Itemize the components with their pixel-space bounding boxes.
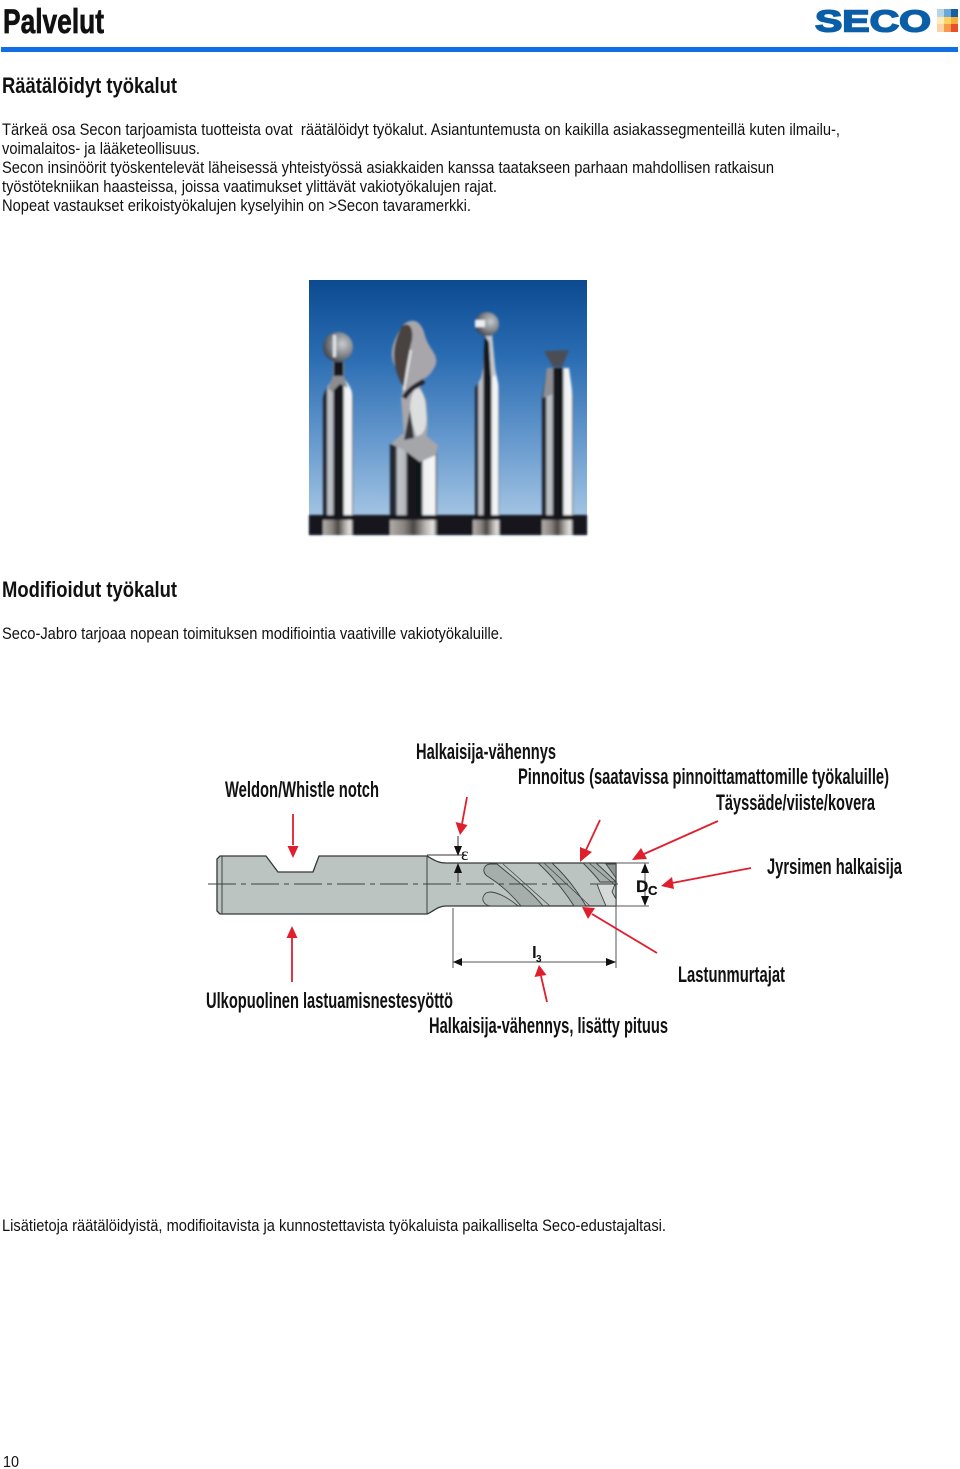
tool 3: small ball nose [473,312,500,535]
label: Lastunmurtajat: Lastunmurtajat [678,962,785,987]
logo wordmark: SECO [815,4,931,38]
dimension marks: epsilon, l3, Dc: l [532,943,537,962]
label: Ulkopuolinen lastuamisnestesyöttö: Ulkopuolinen lastuamisnestesyöttö [206,988,453,1013]
logo: SECO [815,4,958,38]
tool 1: ball nose [323,332,353,535]
label: Halkaisija-vähennys: Halkaisija-vähennys [416,739,556,764]
header rule [1,47,958,52]
end mill diagram [206,739,903,1038]
modified tools text: Seco-Jabro tarjoaa nopean toimituksen modifiointia vaativille vakiotyökaluille. [2,624,503,643]
intro text block: Nopeat vastaukset erikoistyökalujen kyselyihin on >Secon tavaramerkki. [2,196,471,215]
centre line [208,883,620,885]
label: Weldon/Whistle notch: Weldon/Whistle notch [225,777,379,802]
tool 4: T-slot cutter [542,350,573,535]
page title: Palvelut [3,3,104,41]
dimension marks: epsilon, l3, Dc: 3 [536,954,542,965]
tool 2: twisted drill [390,321,438,535]
dimension marks: epsilon, l3, Dc [427,836,658,968]
logo colour squares [937,9,958,32]
red callout arrows [286,797,751,1002]
heading: Modifioidut työkalut: Modifioidut työkalut [2,577,178,602]
flutes [483,863,616,906]
tool drawing [208,856,620,914]
heading: Räätälöidyt työkalut: Räätälöidyt työkalut [2,73,178,98]
intro text block: Secon insinöörit työskentelevät läheisessä yhteistyössä asiakkaiden kanssa taatakseen parhaan mahdollisen ratkaisun [2,158,774,177]
intro text block: voimalaitos- ja lääketeollisuus. [2,139,200,158]
dimension marks: epsilon, l3, Dc: C [648,883,658,898]
intro text block: Tärkeä osa Secon tarjoamista tuotteista ovat räätälöidyt työkalut. Asiantuntemusta on kaikilla asiakassegmenteillä kuten ilmailu-, [2,120,840,139]
photo: four custom cutting tools [309,280,587,535]
intro text block: työstötekniikan haasteissa, joissa vaatimukset ylittävät vakiotyökalujen rajat. [2,177,497,196]
label: Täyssäde/viiste/kovera: Täyssäde/viiste/kovera [716,790,876,815]
dimension marks: epsilon, l3, Dc: ε [461,844,469,864]
label: Halkaisija-vähennys, lisätty pituus: Halkaisija-vähennys, lisätty pituus [429,1013,668,1038]
dimension marks: epsilon, l3, Dc: D [636,877,648,896]
intro text block [2,120,840,215]
closing text: Lisätietoja räätälöidyistä, modifioitavista ja kunnostettavista työkaluista paikalliselta Seco-edustajaltasi. [2,1216,666,1235]
